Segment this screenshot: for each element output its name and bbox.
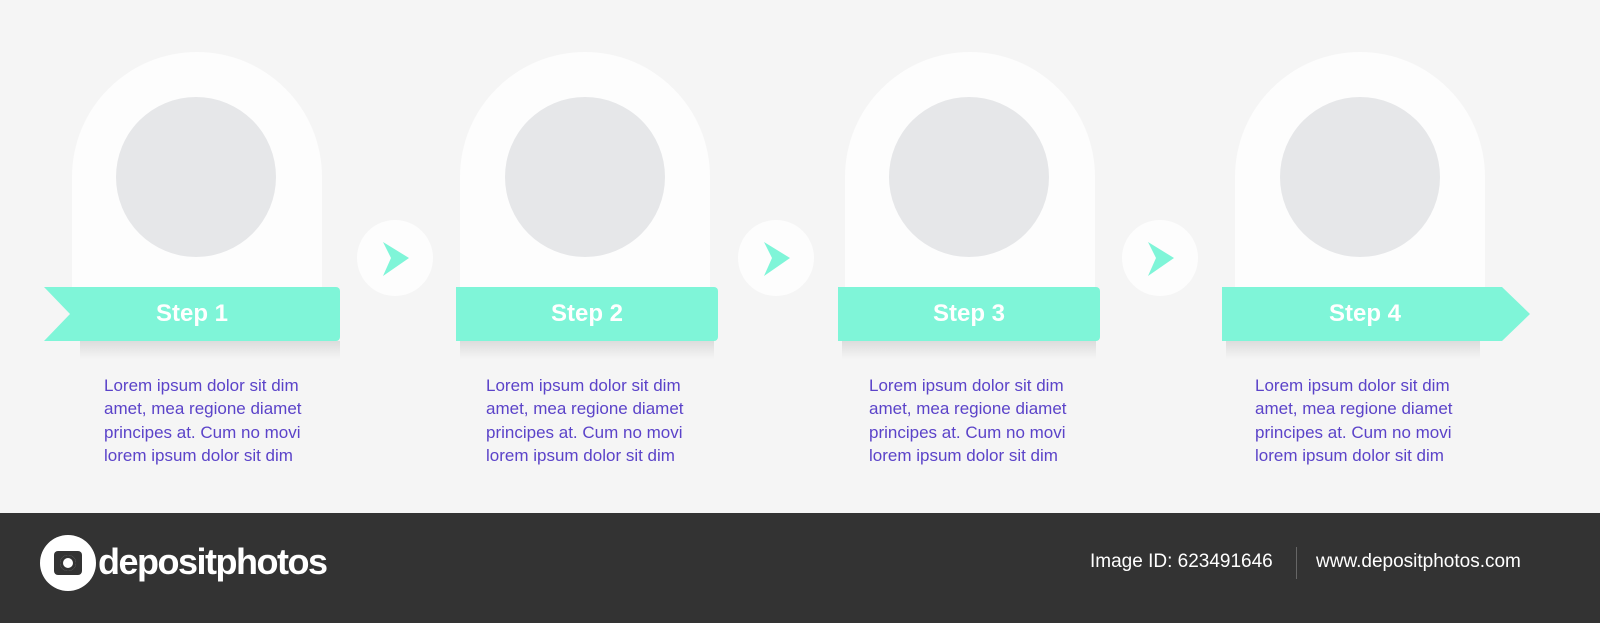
card arch 3: [845, 52, 1095, 292]
shadow 4: [1226, 341, 1480, 359]
text block 2: Lorem ipsum dolor sit dim amet, mea regione diamet principes at. Cum no movi lorem ipsum dolor sit dim: [486, 376, 684, 465]
panel: step 4: [1222, 97, 1530, 465]
icon placeholder circle 3: [889, 97, 1049, 257]
shadow 2: [460, 341, 714, 359]
footer logo: [40, 535, 327, 591]
ribbon: Step 3: Step 3: [933, 300, 1005, 327]
footer image id: Image ID: 623491646: [1090, 551, 1273, 572]
ribbon: Step 2: Step 2: [551, 300, 623, 327]
footer bar: [0, 513, 1600, 623]
text block 4: Lorem ipsum dolor sit dim amet, mea regione diamet principes at. Cum no movi lorem ipsum dolor sit dim: [1255, 376, 1452, 465]
shadow 1: [80, 341, 340, 359]
text block 3: Lorem ipsum dolor sit dim amet, mea regione diamet principes at. Cum no movi lorem ipsum dolor sit dim: [869, 376, 1066, 465]
icon placeholder circle 1: [116, 97, 276, 257]
icon: camera: [40, 535, 96, 591]
ribbon: Step 1: Step 1: [156, 300, 228, 327]
arrow 2: [738, 220, 814, 296]
icon placeholder circle 2: [505, 97, 665, 257]
panel: step 2: [456, 97, 718, 465]
ribbon: Step 1: [44, 287, 340, 341]
shadow 3: [842, 341, 1096, 359]
icon placeholder circle 4: [1280, 97, 1440, 257]
panel: step 3: [838, 97, 1100, 465]
footer url: www.depositphotos.com: [1316, 551, 1521, 572]
ribbon: Step 2: [456, 287, 718, 341]
card arch 1: [72, 52, 322, 292]
ribbon: Step 4: [1222, 287, 1530, 341]
footer logo: depositphotos: [98, 541, 326, 582]
card arch 4: [1235, 52, 1485, 292]
ribbon: Step 3: [838, 287, 1100, 341]
ribbon: Step 4: Step 4: [1329, 300, 1401, 327]
text block 1: Lorem ipsum dolor sit dim amet, mea regione diamet principes at. Cum no movi lorem ipsum dolor sit dim: [104, 376, 302, 465]
arrow 1: [357, 220, 433, 296]
panel: step 1: [44, 97, 340, 465]
card arch 2: [460, 52, 710, 292]
arrow 3: [1122, 220, 1198, 296]
